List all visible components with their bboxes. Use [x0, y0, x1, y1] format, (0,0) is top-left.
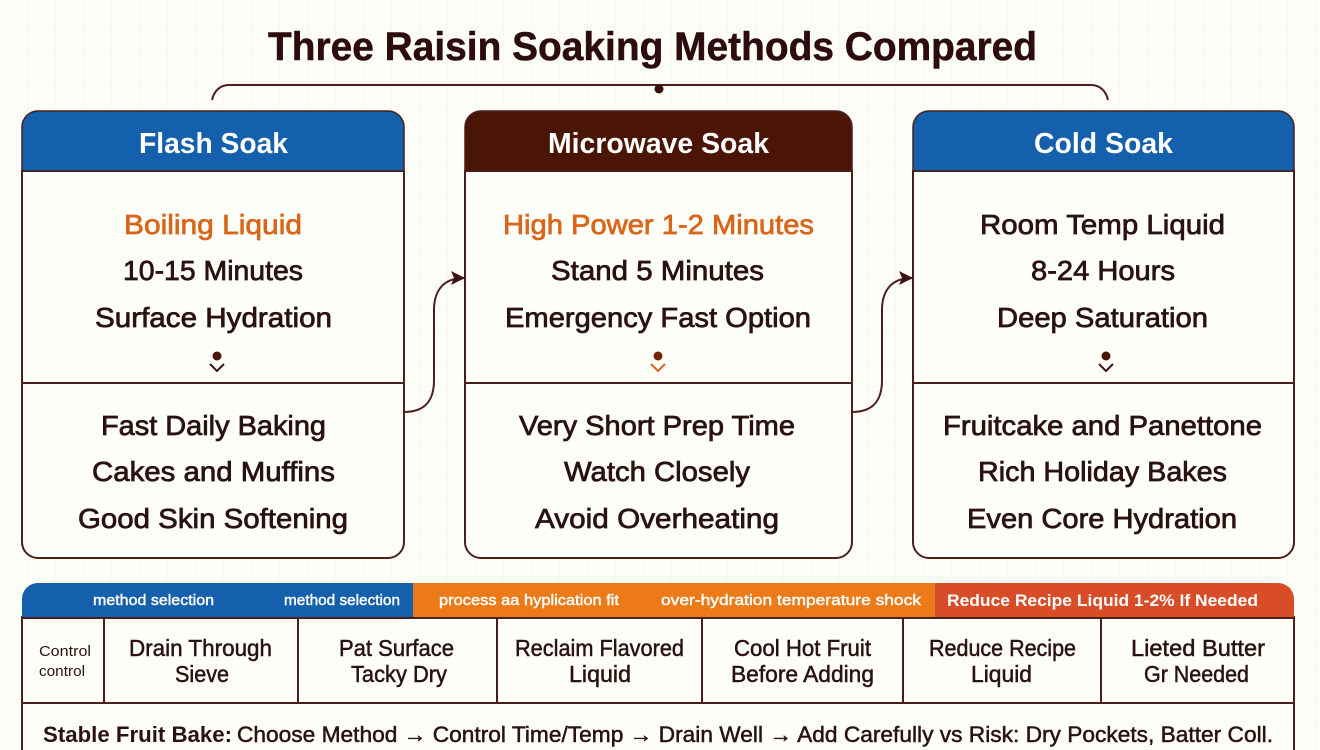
step: reduce recipe liquid — [929, 635, 1076, 687]
microwave soak header — [465, 111, 852, 171]
cold soak header — [913, 111, 1294, 171]
microwave soak use cases — [519, 410, 795, 534]
bracket connector linking the three methods — [212, 84, 1108, 100]
microwave soak use cases: Avoid Overheating — [535, 503, 779, 534]
step: pat surface tacky dry — [339, 635, 454, 687]
category bar: process aa hyplication fit — [439, 592, 620, 609]
microwave soak use cases: Very Short Prep Time — [519, 410, 795, 441]
cold soak process details: 8-24 Hours — [1031, 255, 1175, 286]
flash soak header: Flash Soak — [139, 128, 289, 160]
category bar: method selection — [284, 592, 400, 609]
row label: Control — [39, 643, 91, 660]
arrow: flash soak to microwave soak — [404, 278, 464, 412]
microwave soak process details — [503, 209, 814, 333]
panel: cold soak — [913, 111, 1294, 558]
step: pat surface tacky dry: Pat Surface — [339, 635, 454, 661]
step: pat surface tacky dry: Tacky Dry — [351, 661, 447, 687]
step: cool hot fruit: Cool Hot Fruit — [734, 635, 872, 661]
cold soak use cases — [943, 410, 1262, 534]
cold soak process details — [980, 209, 1225, 333]
panel: microwave soak — [465, 111, 852, 558]
microwave soak process details: High Power 1-2 Minutes — [503, 209, 814, 240]
flash soak process details: Surface Hydration — [95, 302, 332, 333]
arrow: microwave soak to cold soak — [852, 278, 912, 412]
icon: cold soak dot and chevron — [1099, 352, 1113, 371]
step: butter if needed: Gr Needed — [1144, 661, 1249, 687]
step: reduce recipe liquid: Reduce Recipe — [929, 635, 1076, 661]
step: reclaim flavored liquid: Liquid — [569, 661, 631, 687]
row label — [39, 643, 91, 680]
step: reclaim flavored liquid: Reclaim Flavored — [515, 635, 684, 661]
microwave soak process details: Stand 5 Minutes — [551, 255, 764, 286]
category bar: over-hydration temperature shock — [661, 592, 922, 609]
summary line: Choose Method → Control Time/Temp → Drain Well → Add Carefully vs Risk: Dry Pockets, Batter Coll. — [237, 722, 1273, 747]
category bar: method selection — [93, 592, 214, 609]
step: reduce recipe liquid: Liquid — [971, 661, 1032, 687]
panel: flash soak — [22, 111, 404, 558]
step: cool hot fruit — [731, 635, 874, 687]
cold soak process details: Room Temp Liquid — [980, 209, 1225, 240]
step: drain through sieve — [129, 635, 272, 687]
step: butter if needed — [1131, 635, 1265, 687]
microwave soak use cases: Watch Closely — [564, 456, 750, 487]
panel: control table — [22, 583, 1294, 750]
icon: flash soak dot and chevron — [210, 352, 224, 371]
flash soak process details — [95, 209, 332, 333]
summary line: Stable Fruit Bake: — [43, 722, 232, 747]
icon: microwave soak dot and chevron — [651, 352, 665, 371]
step: butter if needed: Lieted Butter — [1131, 635, 1265, 661]
microwave soak process details: Emergency Fast Option — [505, 302, 811, 333]
cold soak use cases: Rich Holiday Bakes — [978, 456, 1227, 487]
cold soak header: Cold Soak — [1034, 128, 1174, 160]
category bar — [22, 583, 1294, 618]
title: Three Raisin Soaking Methods Compared — [268, 25, 1037, 69]
flash soak use cases: Fast Daily Baking — [101, 410, 326, 441]
flash soak process details: Boiling Liquid — [124, 209, 302, 240]
step: reclaim flavored liquid — [515, 635, 684, 687]
cold soak process details: Deep Saturation — [997, 302, 1208, 333]
flash soak use cases — [78, 410, 348, 534]
microwave soak header: Microwave Soak — [548, 128, 770, 160]
step: cool hot fruit: Before Adding — [731, 661, 874, 687]
cold soak use cases: Fruitcake and Panettone — [943, 410, 1262, 441]
step: drain through sieve: Sieve — [175, 661, 229, 687]
cold soak use cases: Even Core Hydration — [967, 503, 1237, 534]
flash soak use cases: Good Skin Softening — [78, 503, 348, 534]
category bar: Reduce Recipe Liquid 1-2% If Needed — [947, 591, 1258, 610]
flash soak header — [22, 111, 404, 171]
step: drain through sieve: Drain Through — [129, 635, 272, 661]
flash soak use cases: Cakes and Muffins — [92, 456, 335, 487]
flash soak process details: 10-15 Minutes — [123, 255, 303, 286]
row label: control — [39, 663, 85, 680]
